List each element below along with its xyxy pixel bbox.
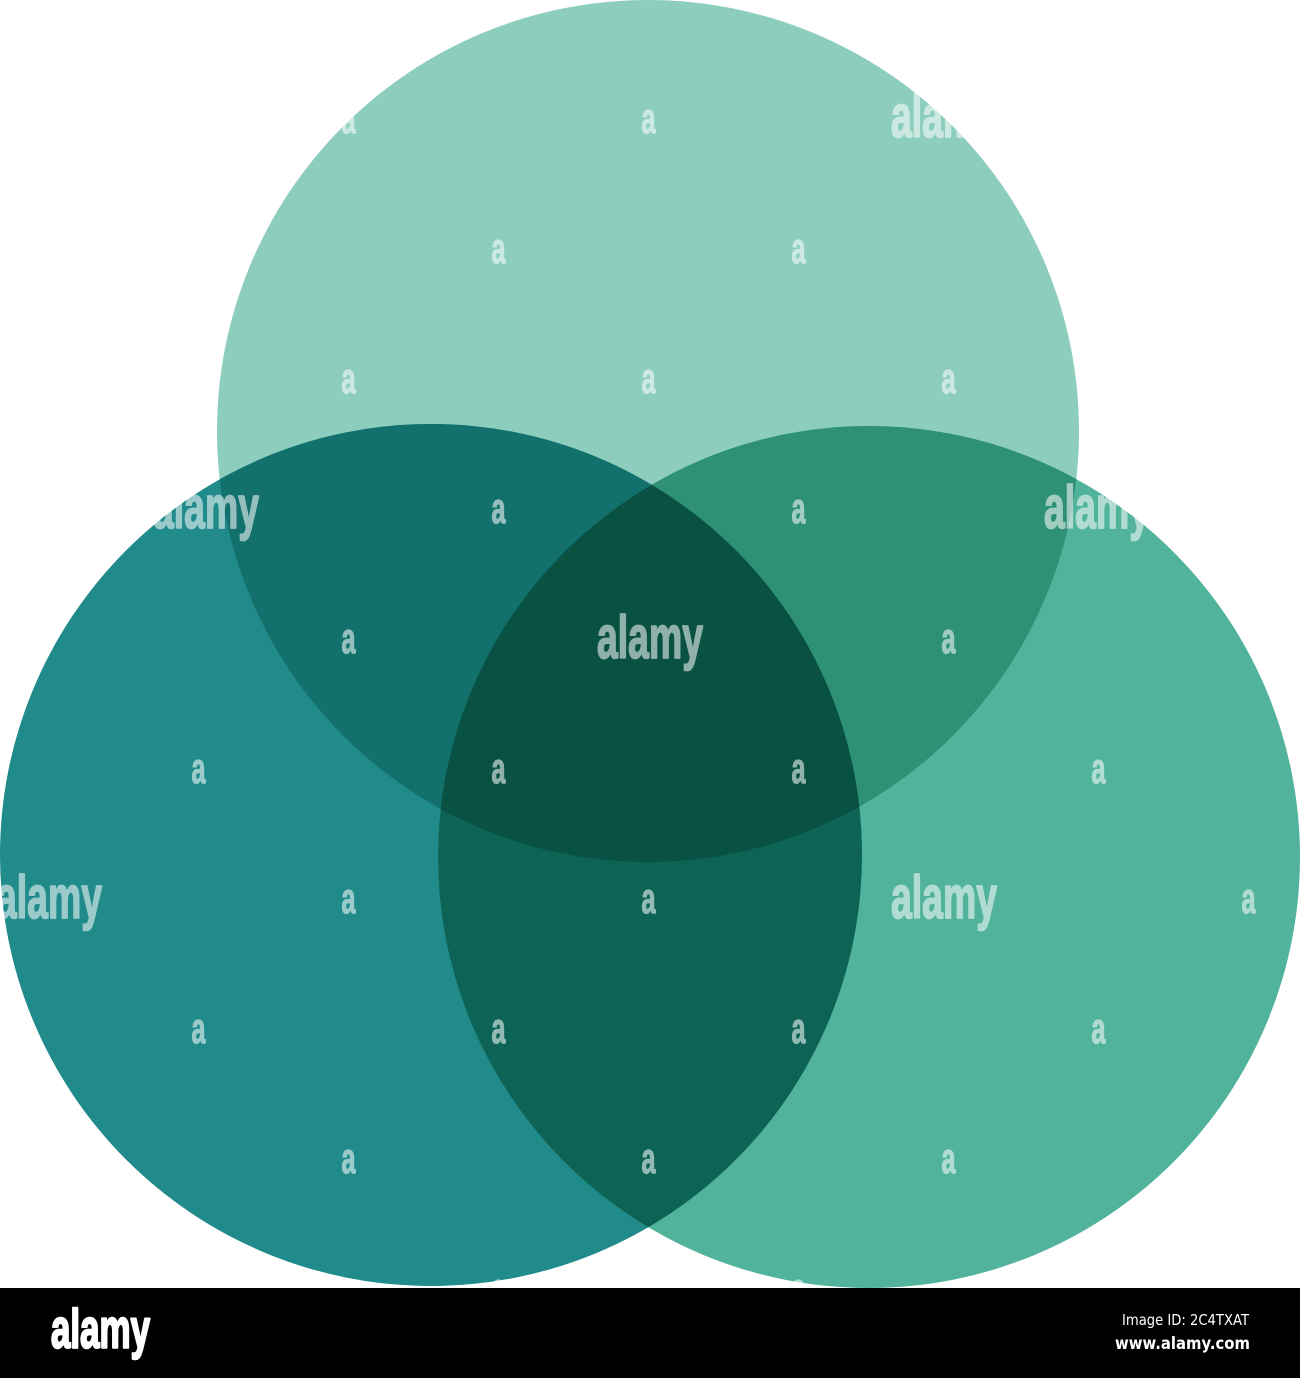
watermark pattern: a — [492, 1265, 506, 1313]
overlap: left and right — [438, 485, 862, 1228]
watermark pattern: a — [792, 745, 806, 793]
watermark pattern: a — [642, 875, 656, 923]
watermark pattern: a — [492, 745, 506, 793]
watermark pattern: a — [642, 355, 656, 403]
watermark pattern: a — [1092, 745, 1106, 793]
watermark pattern: alamy — [891, 83, 997, 150]
watermark pattern: alamy — [891, 864, 997, 931]
overlap: center of all three — [440, 485, 860, 862]
watermark pattern: a — [942, 355, 956, 403]
watermark pattern: alamy — [597, 604, 703, 671]
watermark pattern: alamy — [1044, 474, 1150, 541]
watermark pattern: a — [492, 1005, 506, 1053]
circle: left — [0, 424, 862, 1286]
footer bar — [0, 1288, 1300, 1378]
overlap: top and right — [652, 426, 1076, 806]
watermark pattern: a — [192, 745, 206, 793]
watermark pattern: a — [492, 485, 506, 533]
watermark pattern: a — [192, 1005, 206, 1053]
watermark pattern: a — [1242, 875, 1256, 923]
watermark pattern: a — [342, 355, 356, 403]
overlap: top and left — [220, 424, 652, 808]
watermark pattern: a — [792, 1265, 806, 1313]
watermark pattern: a — [342, 615, 356, 663]
watermark pattern: a — [342, 1135, 356, 1183]
watermark pattern: a — [492, 225, 506, 273]
watermark pattern: a — [792, 485, 806, 533]
watermark pattern: alamy — [153, 474, 259, 541]
watermark pattern: a — [1092, 1005, 1106, 1053]
watermark pattern: a — [342, 875, 356, 923]
circle: top — [217, 0, 1079, 862]
watermark pattern: a — [792, 1005, 806, 1053]
watermark pattern: a — [642, 1135, 656, 1183]
watermark pattern: a — [792, 225, 806, 273]
watermark pattern: a — [342, 95, 356, 143]
watermark pattern: a — [942, 615, 956, 663]
watermark pattern: a — [642, 95, 656, 143]
website url: www.alamy.com — [1115, 1334, 1250, 1354]
watermark pattern: a — [942, 1135, 956, 1183]
footer logo: alamy — [51, 1298, 150, 1360]
image id: Image ID: 2C4TXAT — [1122, 1312, 1250, 1329]
circle: right — [438, 426, 1300, 1288]
watermark pattern: alamy — [0, 864, 102, 931]
